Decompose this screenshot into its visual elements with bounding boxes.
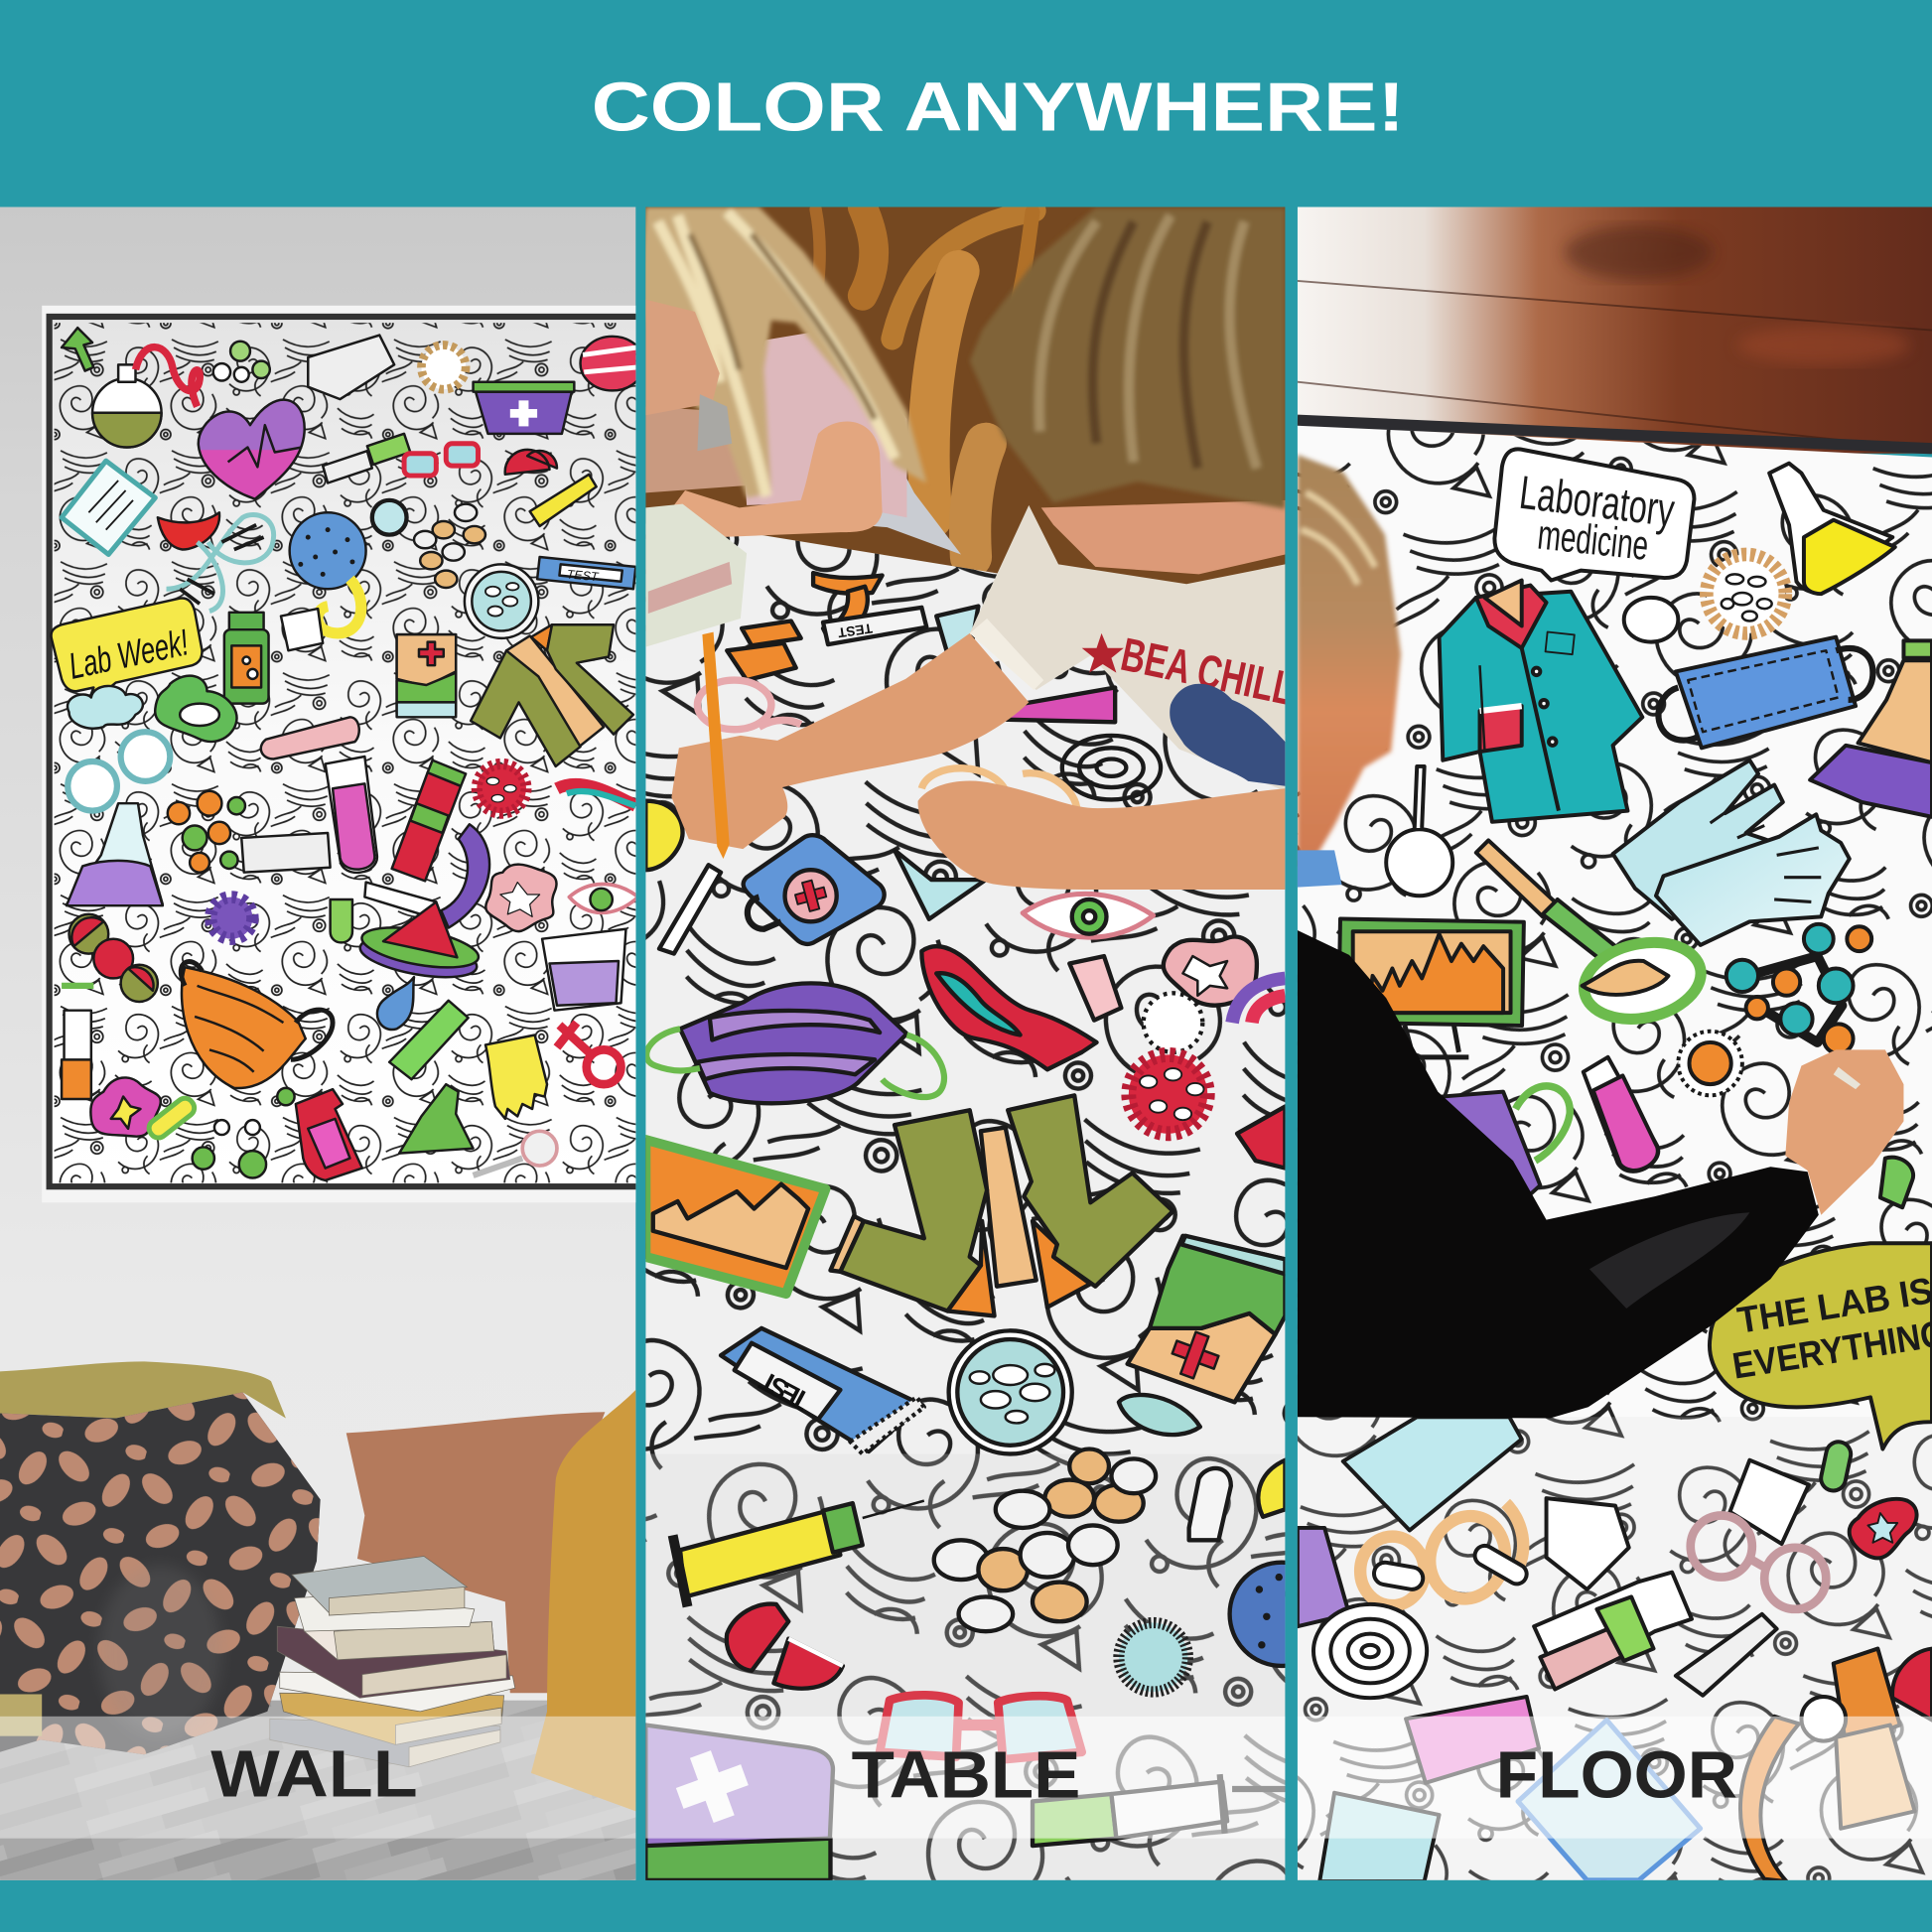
icon: blue drop	[377, 977, 414, 1030]
icon: green vial	[331, 899, 352, 942]
blue shoulder patch	[1298, 850, 1342, 888]
panel: wall	[0, 207, 644, 1880]
icon: magenta test tube	[326, 757, 377, 873]
thermometer	[659, 865, 721, 954]
pink glasses	[1691, 1516, 1826, 1609]
icon: red virus	[477, 763, 526, 813]
black sleeve	[1298, 930, 1819, 1418]
monitor	[1338, 919, 1524, 1057]
icon: tan cells	[414, 504, 485, 588]
icon: orange green molecule	[168, 791, 245, 873]
green bag	[1119, 1236, 1285, 1435]
teal corner	[936, 607, 978, 663]
orange microscope	[727, 573, 883, 680]
icon: bandage	[261, 717, 359, 759]
callout: Laboratory medicine: medicine	[1536, 510, 1651, 569]
caption strip: floor	[1298, 1717, 1932, 1839]
capsule pair	[1372, 1542, 1530, 1591]
rainbow arc	[1232, 978, 1285, 1023]
title: COLOR ANYWHERE!	[592, 69, 1405, 146]
caption strip: wall	[0, 1717, 635, 1839]
orange sun dial	[1678, 1032, 1742, 1095]
red pill	[727, 1604, 843, 1689]
dress	[741, 328, 906, 517]
icon: DNA	[167, 515, 274, 612]
shirt print: BEA CHILL: BEA CHILL	[1117, 627, 1299, 715]
pink ring	[697, 680, 801, 730]
marker	[1834, 1067, 1861, 1089]
callout: Lab Week	[52, 599, 203, 707]
icon: bag with red cross	[397, 634, 456, 717]
person head	[1298, 455, 1401, 868]
icon: green syringe	[323, 434, 410, 483]
icon: teal glasses	[68, 732, 170, 811]
collar	[697, 394, 732, 451]
hand	[1785, 1049, 1903, 1215]
teal note	[895, 850, 986, 919]
icon: purple virus	[210, 897, 252, 939]
icon: petri dish	[465, 564, 538, 638]
red pie	[1892, 1649, 1932, 1721]
blue dotted ball	[1230, 1563, 1333, 1666]
magnifier	[1386, 766, 1452, 896]
icon: red glasses	[404, 444, 479, 476]
face	[645, 300, 720, 415]
blue clipboard	[1518, 1721, 1701, 1880]
icon: pills	[69, 914, 158, 1002]
table sheet	[645, 523, 1285, 1880]
icon: green arrow	[62, 328, 93, 371]
spiral rose	[1062, 736, 1161, 799]
label: TABLE: TABLE	[852, 1738, 1080, 1813]
icon: microscope	[357, 760, 489, 985]
green petri dish	[1577, 932, 1708, 1030]
lab coat	[1440, 581, 1642, 822]
icon: clipboard	[62, 461, 155, 554]
blood bag	[1547, 1498, 1629, 1589]
icon: blue dotted circle	[290, 512, 366, 589]
yellow flask	[1769, 464, 1895, 594]
dotted cells	[1144, 993, 1202, 1052]
purple flask	[1810, 640, 1932, 817]
icon: magnifier	[474, 1131, 557, 1175]
icon: green syringe lower	[389, 1001, 469, 1079]
callout: Laboratory medicine: Laboratory	[1517, 466, 1678, 536]
basket	[0, 1392, 321, 1754]
icon: heart	[199, 400, 305, 499]
yellow crescent	[1258, 1460, 1285, 1517]
rose spiral	[1313, 1604, 1427, 1698]
tan virus	[1707, 554, 1785, 633]
monitor	[645, 1140, 826, 1294]
icon: pink amoeba	[485, 865, 557, 931]
table drawings	[645, 573, 1333, 1880]
icon: yellow swirl	[318, 579, 361, 633]
sleeve cuff	[970, 619, 1043, 690]
tan cells large	[934, 1449, 1156, 1631]
panel: floor	[1298, 207, 1932, 1881]
green syringe barrel	[1033, 1774, 1285, 1846]
green cap	[1880, 1158, 1913, 1207]
lab pants large	[830, 1095, 1173, 1315]
red teal squiggle	[921, 946, 1097, 1069]
icon: gauze roll	[308, 336, 394, 399]
purple mask	[646, 983, 944, 1103]
red virus	[1129, 1054, 1207, 1134]
tag and capsules	[1729, 1440, 1853, 1544]
TEST tube large	[721, 1328, 924, 1453]
cell	[1624, 598, 1678, 642]
purple kit large	[645, 1725, 833, 1880]
hair	[638, 207, 926, 497]
icon: purple beaker	[542, 929, 625, 1011]
storage box	[645, 504, 747, 647]
icon: olive flask	[92, 364, 162, 448]
tan ring	[921, 768, 1077, 811]
icon: TEST tube: TEST	[566, 567, 600, 584]
eye	[1023, 894, 1154, 937]
icon: tan virus	[421, 345, 466, 389]
icon: lens	[372, 500, 407, 535]
skirt	[860, 431, 961, 554]
petri dish large	[949, 1330, 1072, 1453]
panel: table	[638, 207, 1333, 1880]
pillow	[346, 1412, 605, 1693]
arm	[671, 633, 1029, 849]
lab note	[1319, 1793, 1440, 1881]
callout: Laboratory medicine	[1494, 449, 1694, 581]
icon: green flask	[399, 1084, 474, 1154]
purple masked edge	[1442, 1086, 1570, 1210]
callout: The Lab Is Everything	[1710, 1243, 1932, 1449]
spatula grey	[1676, 1614, 1777, 1696]
shirt print: BEA CHILL	[1082, 627, 1299, 715]
second arm	[918, 780, 1285, 890]
TEST tube large: TEST	[754, 1365, 814, 1417]
face	[1041, 500, 1285, 574]
yellow syringe large	[673, 1501, 924, 1606]
capsule	[1189, 1468, 1231, 1540]
pink tube	[1534, 1573, 1692, 1690]
icon: magenta flower	[90, 1077, 161, 1137]
icon: purple kit	[474, 382, 574, 434]
magenta band	[1007, 688, 1115, 722]
icon: red striped mask	[581, 337, 644, 390]
icon: red tube	[136, 347, 200, 407]
purple edge beaker	[1298, 1528, 1349, 1626]
stack of books	[270, 1556, 515, 1767]
upside-down TEST tube: TEST	[836, 621, 874, 640]
teal molecule	[1726, 924, 1871, 1053]
label: FLOOR: FLOOR	[1496, 1738, 1737, 1813]
pencil	[702, 632, 730, 859]
icon: orange mask	[181, 961, 333, 1088]
icon: yellow glove	[485, 1035, 547, 1119]
teal lens	[1119, 1622, 1187, 1692]
icon: green amoeba	[155, 676, 237, 742]
microscope base	[1237, 1106, 1285, 1169]
icon: red teal squiggle	[557, 784, 635, 806]
teal note	[1343, 1417, 1522, 1530]
orange microscope	[1740, 1649, 1915, 1881]
girl	[638, 207, 961, 554]
floor	[0, 1701, 635, 1880]
shirt print: whale	[1170, 684, 1285, 786]
icon: purple flask	[67, 803, 163, 905]
wood floor	[1298, 207, 1932, 454]
boy	[671, 208, 1299, 890]
t-shirt	[970, 505, 1285, 791]
pink mask	[1406, 1697, 1539, 1783]
pink amoeba	[1164, 937, 1257, 1006]
label: WALL: WALL	[210, 1736, 418, 1811]
yellow dial	[645, 801, 683, 870]
icon: green bubbles	[213, 342, 270, 382]
icon: red bottle	[296, 1089, 362, 1180]
magenta test tube	[1584, 1057, 1658, 1172]
icon: lab pants	[471, 624, 633, 766]
floor poster drawings	[1298, 449, 1932, 1881]
dining room background	[645, 207, 1285, 602]
icon: eye	[569, 884, 638, 912]
icon: female symbol	[557, 1023, 621, 1084]
hair	[970, 208, 1285, 509]
red glasses large	[880, 1695, 1082, 1759]
blue mug	[744, 835, 885, 944]
poster on wall	[42, 306, 644, 1202]
spatula	[1476, 840, 1650, 987]
icon: glass tube	[241, 833, 331, 873]
icon: yellow syringe	[530, 475, 597, 526]
arm	[670, 422, 883, 537]
chest shadow	[645, 407, 747, 492]
icon: clouds	[68, 686, 143, 729]
blue gloves	[1613, 760, 1850, 945]
icon: orange syringe	[62, 986, 93, 1099]
red amoeba	[1850, 1499, 1917, 1558]
icon: lab grid	[281, 609, 323, 650]
wooden chairs	[816, 207, 1035, 557]
pouf	[531, 1390, 635, 1811]
callout: Lab Week: Lab Week!	[66, 621, 192, 687]
icon: red face mask	[158, 512, 219, 550]
blue mask	[1658, 637, 1872, 748]
basket weave	[0, 1694, 42, 1736]
icon: green molecule	[193, 1088, 295, 1177]
olive blanket	[0, 1361, 286, 1418]
icon: green bottle	[224, 613, 269, 704]
tan rings	[1360, 1503, 1523, 1609]
toothbrush	[1069, 956, 1121, 1021]
icon: green oval	[146, 1095, 198, 1142]
poster on floor	[1298, 420, 1932, 1880]
icon: red pill	[505, 450, 557, 475]
icon: TEST tube	[537, 557, 635, 589]
caption strip: table	[645, 1717, 1285, 1839]
upside-down TEST tube	[823, 608, 926, 644]
